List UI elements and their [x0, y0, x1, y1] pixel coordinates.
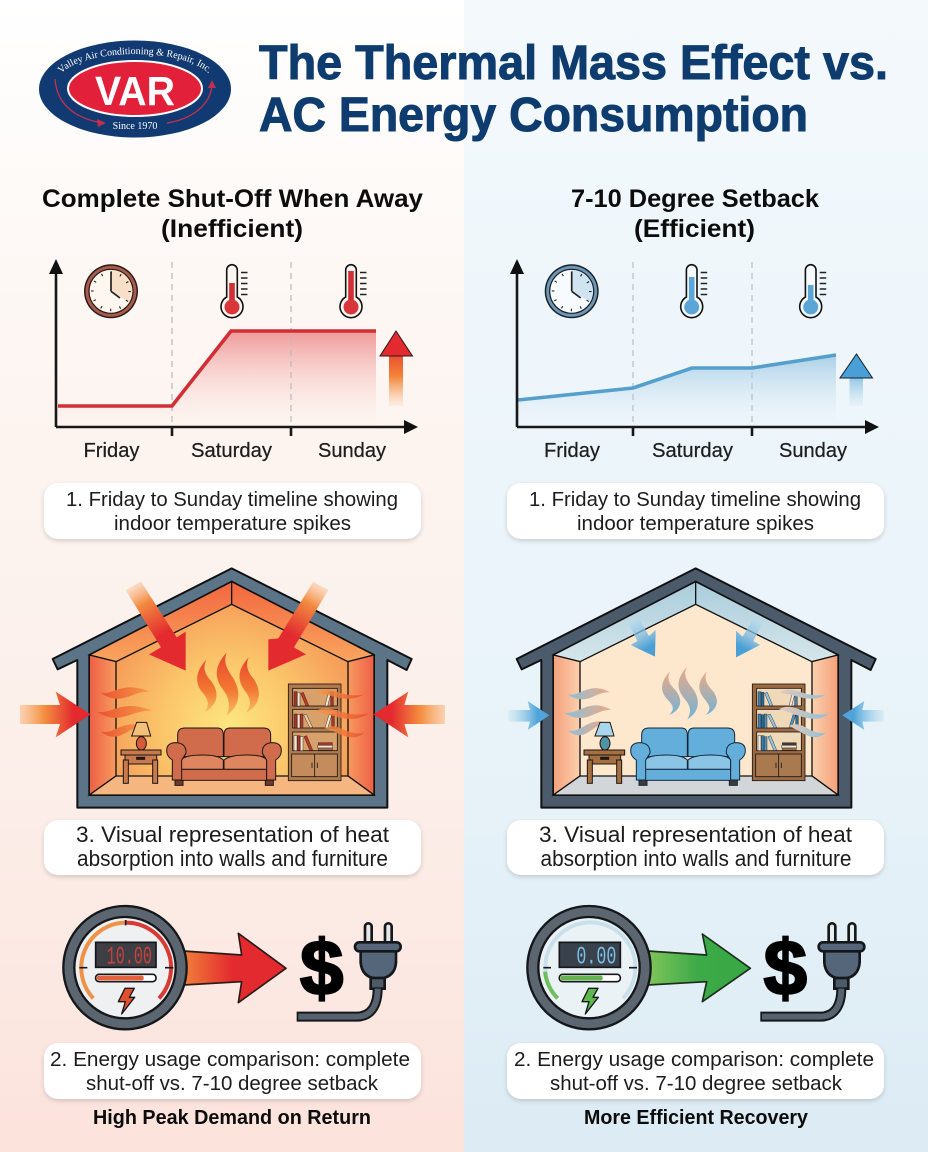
arrow: high energy	[183, 933, 286, 1003]
arrow: temperature rising	[380, 331, 412, 406]
title	[259, 37, 888, 142]
callout: heat absorption: 3. Visual representation of heat	[76, 822, 389, 847]
illustration: hot house with heat absorption	[20, 568, 445, 808]
illustration: energy meter to cost, efficient	[527, 906, 864, 1029]
callout: energy comparison: 2. Energy usage comparison: complete	[50, 1048, 410, 1071]
arrow: cool air roof left	[628, 617, 656, 657]
callout: heat absorption: 3. Visual representation of heat	[539, 822, 852, 847]
icon: thermometer medium	[221, 265, 248, 318]
logo: VAR oval badge	[39, 40, 231, 138]
line chart: gentle temperature rise	[510, 259, 879, 462]
logo: VAR oval badge: Since 1970	[113, 121, 157, 132]
caption: high peak demand: High Peak Demand on Return	[93, 1107, 371, 1129]
arrow: heat from right wall	[373, 692, 445, 737]
callout: energy comparison	[507, 1043, 884, 1099]
title: The Thermal Mass Effect vs.	[259, 37, 888, 90]
callout: timeline	[507, 483, 884, 539]
heat waves right wall	[779, 690, 829, 737]
heading: complete shut-off: (Inefficient)	[161, 215, 303, 243]
heat waves center	[197, 653, 259, 716]
furniture: sofa	[631, 728, 745, 785]
day labels	[84, 439, 387, 462]
arrow: heat from roof right	[268, 582, 328, 671]
arrow: heat from roof left	[126, 582, 186, 671]
heading: complete shut-off: Complete Shut-Off When Away	[42, 185, 423, 213]
illustration: cool house with light heat absorption	[508, 568, 884, 808]
icon: thermometer high	[340, 265, 366, 318]
icon: dollar sign: $	[300, 923, 343, 1011]
arrow: slight rise	[840, 354, 872, 406]
background: left warm panel	[0, 0, 464, 1152]
callout: timeline: 1. Friday to Sunday timeline showing	[529, 488, 861, 511]
heat waves right wall	[315, 689, 368, 737]
heat waves left wall	[564, 688, 611, 735]
furniture: side table and lamp	[584, 722, 625, 783]
line chart: temperature spike Friday to Sunday	[49, 259, 418, 462]
icon: clock	[84, 264, 138, 318]
icon: thermometer mild	[800, 265, 826, 318]
callout: energy comparison: shut-off vs. 7-10 degree setback	[86, 1072, 379, 1095]
heading: setback: 7-10 Degree Setback	[571, 185, 819, 213]
furniture: bookcase	[288, 684, 341, 781]
arrow: cool air left wall	[508, 701, 549, 730]
icon: energy meter	[527, 906, 651, 1029]
callout: energy comparison: shut-off vs. 7-10 degree setback	[550, 1072, 843, 1095]
icon: thermometer cool	[681, 265, 707, 318]
callout: timeline: indoor temperature spikes	[577, 512, 814, 535]
icon: dollar sign: $	[764, 923, 807, 1011]
heading: setback	[571, 185, 819, 243]
day labels: Friday	[544, 439, 601, 462]
day labels: Friday	[84, 439, 140, 462]
furniture: sofa	[167, 728, 281, 785]
panel: complete shut-off (inefficient)	[20, 185, 445, 1129]
callout: timeline: 1. Friday to Sunday timeline showing	[66, 488, 398, 511]
icon: energy meter: 10.00	[107, 943, 152, 972]
callout: heat absorption	[44, 820, 421, 875]
callout: heat absorption: absorption into walls and furniture	[77, 846, 388, 871]
day labels: Saturday	[191, 439, 273, 462]
day labels	[544, 439, 848, 462]
arrow: efficient energy	[648, 934, 750, 1002]
illustration: energy meter to cost, high	[63, 906, 401, 1029]
title: AC Energy Consumption	[259, 89, 808, 142]
heat waves center	[662, 666, 717, 719]
callout: energy comparison: 2. Energy usage comparison: complete	[514, 1048, 874, 1071]
heading: setback: (Efficient)	[634, 215, 755, 243]
panel: 7-10 degree setback (efficient)	[507, 185, 884, 1129]
background: right cool panel	[464, 0, 928, 1152]
arrow: cool air roof right	[736, 618, 763, 657]
furniture: bookcase	[752, 684, 805, 781]
caption: more efficient recovery: More Efficient Recovery	[584, 1107, 809, 1129]
callout: heat absorption: absorption into walls and furniture	[540, 846, 852, 871]
furniture: side table and lamp	[121, 722, 161, 783]
logo: VAR oval badge: VAR	[95, 68, 175, 114]
day labels: Sunday	[318, 439, 387, 462]
day labels: Sunday	[779, 439, 848, 462]
icon: plug	[760, 923, 864, 1017]
heading: complete shut-off	[42, 185, 423, 243]
callout: timeline	[44, 483, 421, 539]
logo: VAR oval badge: Valley Air Conditioning & Repair, Inc.	[57, 48, 210, 73]
callout: timeline: indoor temperature spikes	[114, 512, 351, 535]
callout: energy comparison	[44, 1043, 421, 1099]
day labels: Saturday	[652, 439, 734, 462]
icon: energy meter: 0.00	[576, 943, 616, 972]
arrow: heat from left wall	[20, 692, 91, 737]
callout: heat absorption	[507, 820, 884, 875]
icon: energy meter	[63, 906, 187, 1029]
icon: clock	[545, 264, 599, 318]
icon: plug	[297, 923, 401, 1017]
arrow: cool air right wall	[842, 701, 884, 730]
heat waves left wall	[97, 687, 152, 737]
